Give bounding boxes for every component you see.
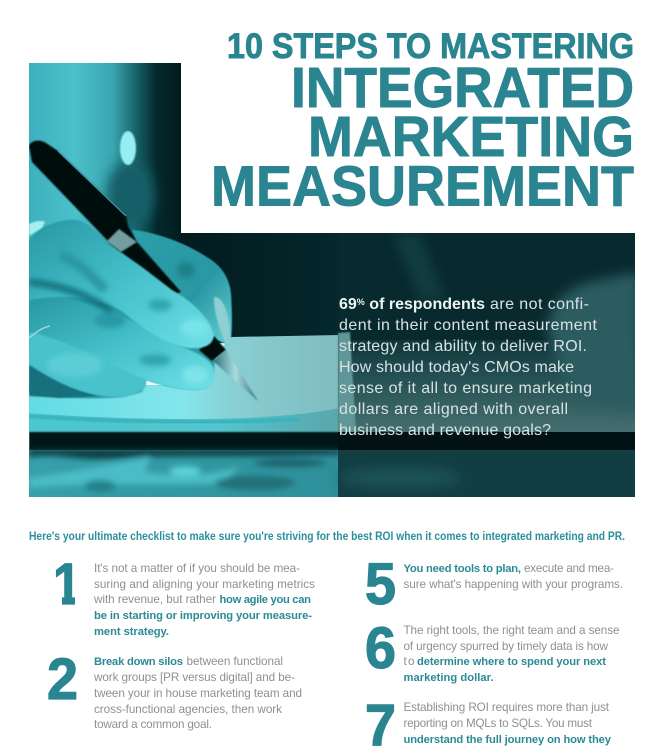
step 6 [365,616,620,684]
number 2: 2 [47,647,78,712]
step 2 text: Break down silos [94,656,183,668]
intro paragraph: of respondents [365,296,485,313]
middle finger [29,297,215,390]
step 2 text [93,655,302,731]
little finger [29,365,100,398]
step 1 text: ment strategy. [94,626,169,638]
step 7 text: Establishing ROI requires more than just [404,701,610,714]
step 1 text: It's not a matter of if you should be mea- [94,562,300,575]
pen tip [213,350,258,401]
step 7 text: understand the full journey on how they [404,734,612,746]
step 2 text: tween your in house marketing team and [94,687,302,700]
thumb nail [214,297,231,345]
step 1 text: be in starting or improving your measure- [94,610,312,622]
intro paragraph: dent in their content measurement [339,317,598,334]
blurred table [29,450,338,497]
step 6 text [404,624,620,684]
intro paragraph: 69 [339,296,357,313]
step 1 text: with revenue, but rather [93,593,216,606]
title: INTEGRATED [291,56,634,120]
step 5 [365,552,623,617]
step 6 text: of urgency spurred by timely data is how [404,640,609,653]
hand silhouette base [29,220,232,398]
pen upper barrel and cap [29,141,181,296]
intro paragraph: strategy and ability to deliver ROI. [339,338,587,355]
step 5 text [404,562,623,591]
intro paragraph: business and revenue goals? [339,422,551,439]
step 6 text: The right tools, the right team and a sense [404,624,620,637]
title: MARKETING [308,105,634,169]
intro paragraph: are not confi- [490,296,589,313]
step 1 text [93,562,315,638]
step 6 text: marketing dollar. [404,672,494,684]
step 7 text [404,701,612,746]
step 1 text: how agile you can [220,594,311,606]
step 5 text: execute and mea- [524,562,614,575]
number 5: 5 [365,552,396,617]
step 7 text: reporting on MQLs to SQLs. You must [404,717,593,730]
title: 10 STEPS TO MASTERING [227,27,634,66]
step 2 [47,647,302,731]
thumb [132,230,232,345]
step 2 text: cross-functional agencies, then work [94,703,282,716]
intro paragraph: dollars are aligned with overall [339,401,568,418]
hand shading [29,255,209,384]
step 1 text: suring and aligning your marketing metrics [94,578,315,591]
step 6 text: determine where to spend your next [417,656,606,668]
intro paragraph: % [357,297,365,307]
title [211,27,634,218]
step 1 [56,563,314,638]
title: MEASUREMENT [211,154,634,218]
wedding ring [29,326,50,338]
light reflection [120,131,136,165]
fingers behind the hand [29,221,45,236]
intro paragraph: How should today's CMOs make [339,359,574,376]
dark translucent text panel [338,233,640,497]
step 2 text: work groups [PR versus digital] and be- [93,671,295,684]
ring finger [29,330,146,397]
black desk edge [29,431,338,450]
step 2 text: between functional [186,655,283,668]
pen metal ring [107,229,137,252]
step 5 text: You need tools to plan, [404,563,521,575]
number 1: 1 [53,552,81,617]
step 7 [365,693,612,749]
step 5 text: sure what's happening with your programs. [404,578,623,591]
paper [29,335,340,424]
step 6 text: to [404,655,415,668]
hero photo: hand writing with a pen [29,63,640,497]
index finger [29,220,214,348]
intro paragraph: sense of it all to ensure marketing [339,380,592,397]
number 6: 6 [365,616,396,681]
step 2 text: toward a common goal. [94,718,212,731]
intro paragraph [339,296,598,439]
pen grip near tip [199,336,226,361]
